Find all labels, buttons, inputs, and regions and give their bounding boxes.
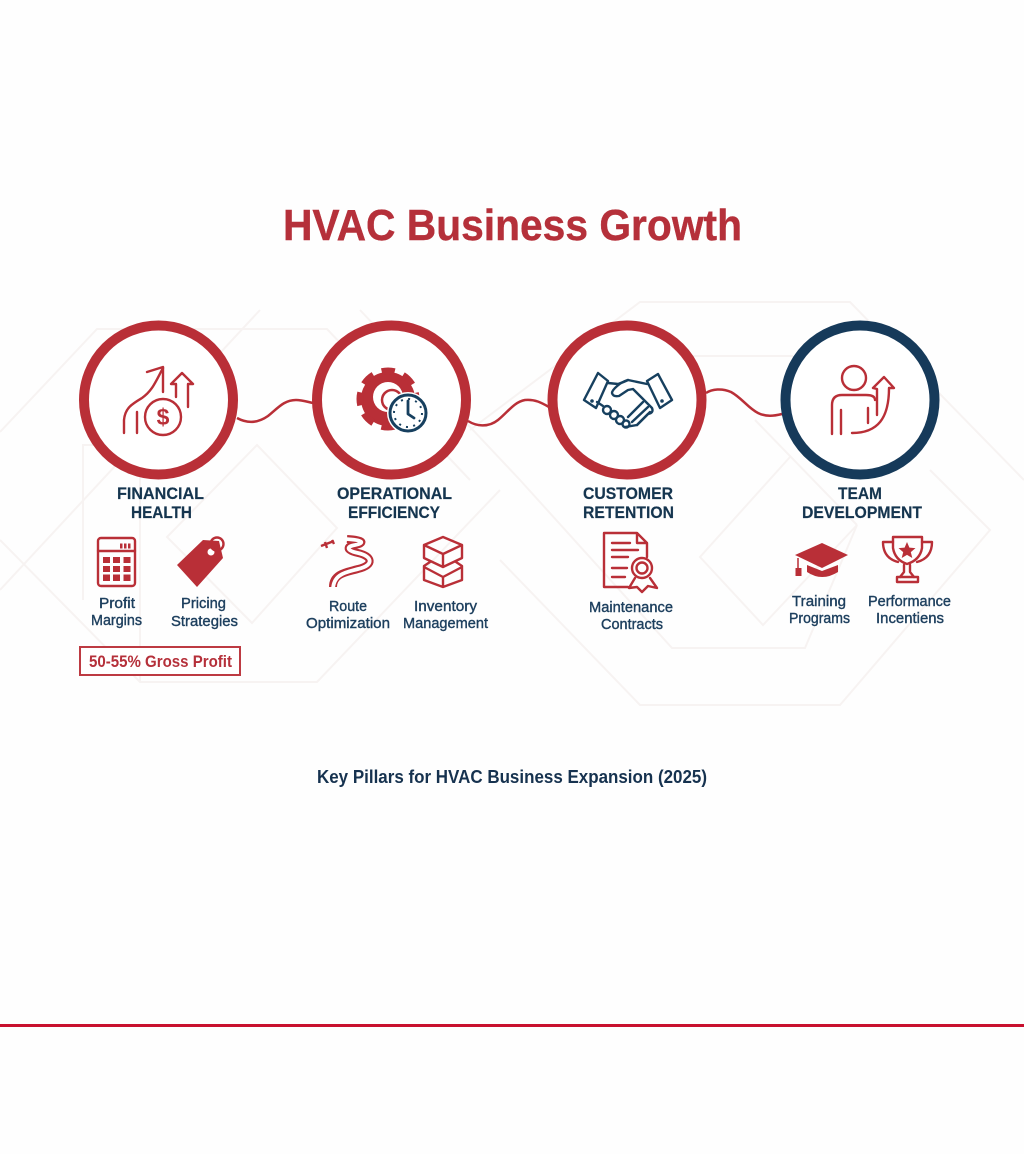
- heading: [337, 484, 452, 522]
- callout: gross profit: 50-55% Gross Profit: [89, 653, 232, 671]
- connector: operational to customer: [468, 400, 549, 425]
- heading: EFFICIENCY: [348, 503, 441, 522]
- icon: money growth: $: [157, 404, 170, 430]
- icon: price tag: [177, 538, 224, 587]
- heading: DEVELOPMENT: [802, 503, 923, 522]
- icon: gear and clock: [360, 371, 429, 434]
- heading: TEAM: [838, 484, 882, 503]
- ring: [552, 326, 702, 474]
- label: training programs: Programs: [789, 610, 850, 627]
- label: profit margins: Margins: [91, 612, 142, 629]
- icon: stacked boxes: [424, 537, 462, 587]
- panel: team development: [786, 326, 951, 627]
- icon: trophy: [883, 537, 932, 582]
- label: performance incentives: [868, 593, 951, 627]
- icon: money growth: [124, 367, 193, 435]
- heading: RETENTION: [583, 503, 674, 522]
- heading: HEALTH: [131, 503, 192, 522]
- panel: customer retention: [552, 326, 702, 633]
- bottom rule: [0, 1024, 1024, 1027]
- panel: operational efficiency: [306, 326, 489, 632]
- icon: person with growth arrow: [832, 366, 894, 434]
- heading: OPERATIONAL: [337, 484, 452, 503]
- label: training programs: [789, 593, 850, 627]
- icon: contract with seal: [604, 533, 657, 592]
- label: maintenance contracts: Contracts: [601, 616, 663, 633]
- title: HVAC Business Growth: [283, 201, 742, 250]
- heading: [583, 484, 674, 522]
- icon: graduation cap: [795, 543, 848, 577]
- heading: [802, 484, 923, 522]
- label: performance incentives: Performance: [868, 593, 951, 610]
- ring: [84, 326, 233, 474]
- icon: handshake: [584, 373, 672, 428]
- heading: [117, 484, 204, 522]
- heading: CUSTOMER: [583, 484, 673, 503]
- label: profit margins: [91, 595, 142, 629]
- heading: FINANCIAL: [117, 484, 204, 503]
- label: performance incentives: Incentiens: [876, 610, 944, 627]
- panel: financial health: [80, 326, 240, 675]
- label: maintenance contracts: Maintenance: [589, 599, 673, 616]
- label: inventory management: [403, 598, 489, 632]
- connector: customer to team: [706, 389, 782, 416]
- label: profit margins: Profit: [99, 595, 136, 612]
- subtitle: Key Pillars for HVAC Business Expansion (2025): [317, 767, 707, 787]
- label: pricing strategies: [171, 595, 238, 630]
- ring: [317, 326, 466, 474]
- label: maintenance contracts: [589, 599, 673, 633]
- label: inventory management: Inventory: [414, 598, 478, 615]
- label: inventory management: Management: [403, 615, 489, 632]
- ring: [786, 326, 934, 474]
- icon: calculator: [98, 538, 135, 586]
- label: pricing strategies: Strategies: [171, 613, 238, 630]
- label: route optimization: Route: [329, 598, 367, 615]
- label: pricing strategies: Pricing: [181, 595, 226, 612]
- label: training programs: Training: [792, 593, 846, 610]
- connector: financial to operational: [237, 400, 313, 422]
- callout: gross profit: [80, 647, 240, 675]
- label: route optimization: [306, 598, 390, 632]
- label: route optimization: Optimization: [306, 615, 390, 632]
- icon: winding route: [321, 539, 370, 590]
